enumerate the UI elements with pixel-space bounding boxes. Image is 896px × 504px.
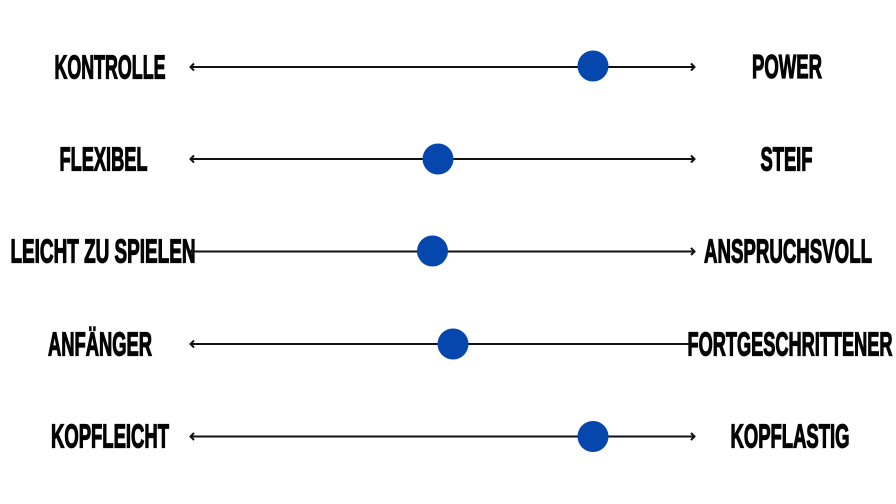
row: Flexibel to Steif [60,140,812,178]
double arrow [190,433,694,440]
marker [578,421,608,452]
double arrow [190,340,694,348]
row: Leicht zu spielen to Anspruchsvoll [10,232,872,270]
label: Power: POWER [752,48,822,85]
label: Kontrolle: KONTROLLE [54,48,166,86]
double arrow [190,248,694,255]
marker [422,144,454,174]
label: Steif: STEIF [760,140,812,178]
row: Kontrolle to Power [54,48,822,86]
row: Kopfleicht to Kopflastig [51,418,850,454]
label: Kopfleicht: KOPFLEICHT [51,418,169,454]
double arrow [190,64,694,70]
label: Leicht zu spielen: LEICHT ZU SPIELEN [10,232,196,270]
marker [438,328,468,360]
row: Anfänger to Fortgeschrittener [48,326,893,362]
marker [578,50,608,82]
marker [417,236,448,266]
label: Anfänger: ANFÄNGER [48,326,152,362]
label: Flexibel: FLEXIBEL [60,140,148,178]
double arrow [190,156,694,162]
